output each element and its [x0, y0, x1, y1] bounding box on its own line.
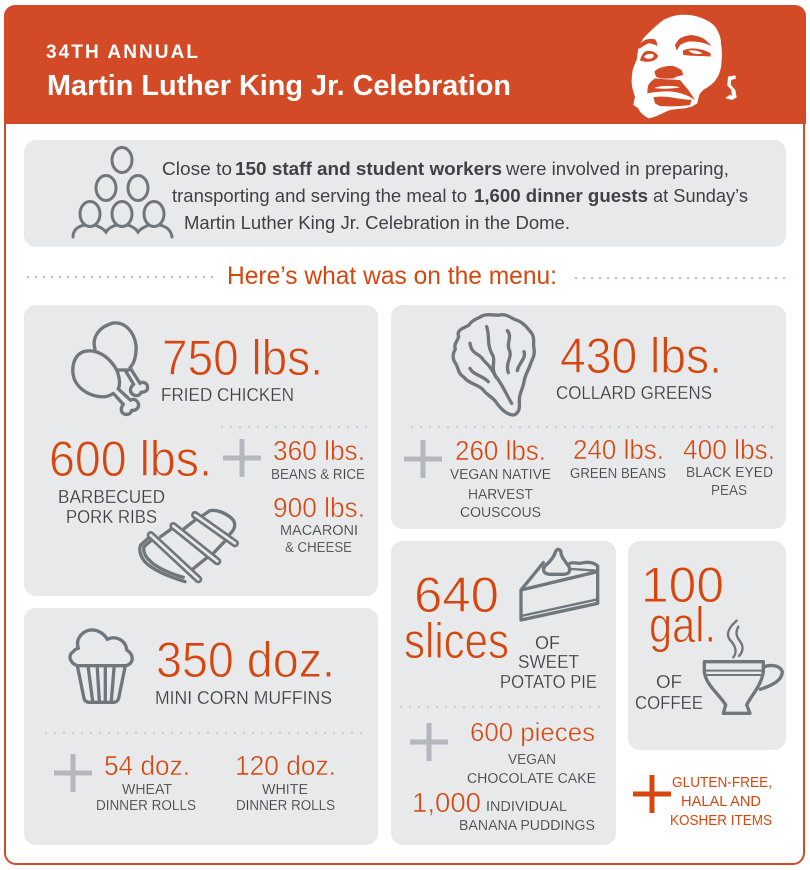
- panel: intro: [24, 140, 786, 247]
- stat: white dinner rolls: DINNER ROLLS: [236, 797, 335, 814]
- facial features: [637, 35, 712, 106]
- callout: gluten-free, halal and kosher: [633, 774, 772, 829]
- stat: vegan chocolate cake: CHOCOLATE CAKE: [467, 770, 596, 787]
- stat: vegan chocolate cake: [467, 717, 596, 787]
- stat: couscous: COUSCOUS: [460, 504, 541, 521]
- stat: beans and rice: BEANS & RICE: [271, 466, 365, 483]
- intro text: Close to: [162, 158, 232, 179]
- stat: white dinner rolls: [235, 750, 336, 814]
- menu heading: Here’s what was on the menu:: [227, 262, 557, 290]
- stat: coffee: [635, 557, 724, 713]
- stat: coffee: OF: [656, 672, 682, 692]
- stat: white dinner rolls: WHITE: [262, 781, 308, 798]
- stat: macaroni and cheese: [273, 492, 365, 556]
- intro text: [162, 158, 748, 233]
- callout: gluten-free, halal and kosher: KOSHER ITEMS: [670, 812, 772, 829]
- stat: fried chicken: [161, 330, 323, 405]
- intro text: were involved in preparing,: [505, 158, 729, 179]
- intro text: Martin Luther King Jr. Celebration in the Dome.: [184, 212, 570, 233]
- header band: [4, 5, 806, 124]
- stat: sweet potato pie: [404, 567, 597, 692]
- stat: sweet potato pie: POTATO PIE: [500, 672, 597, 692]
- stat: macaroni and cheese: 900 lbs.: [273, 492, 365, 523]
- stat: barbecued pork ribs: 600 lbs.: [49, 431, 212, 487]
- stat: mini corn muffins: MINI CORN MUFFINS: [155, 688, 332, 708]
- header kicker: 34TH ANNUAL: [46, 42, 198, 63]
- stat: wheat dinner rolls: 54 doz.: [104, 750, 190, 781]
- stat: mini corn muffins: 350 doz.: [156, 632, 335, 688]
- panel: corn muffins: [24, 608, 378, 845]
- stat: barbecued pork ribs: BARBECUED: [58, 487, 165, 507]
- stat: coffee: 100: [641, 557, 724, 613]
- callout: gluten-free, halal and kosher: GLUTEN-FREE,: [672, 774, 772, 791]
- stat: banana puddings: 1,000: [412, 787, 481, 818]
- ear: [725, 75, 737, 100]
- stat: green beans: GREEN BEANS: [570, 465, 666, 482]
- stat: black eyed peas: PEAS: [711, 482, 747, 499]
- intro text: 150 staff and student workers: [235, 158, 502, 179]
- stat: barbecued pork ribs: PORK RIBS: [66, 507, 157, 527]
- stat: black eyed peas: [683, 434, 775, 499]
- stat: barbecued pork ribs: [49, 431, 212, 527]
- icon: chicken drumsticks: [73, 323, 148, 414]
- icon: portrait of Martin Luther King Jr.: [632, 15, 737, 118]
- stat: couscous: HARVEST: [468, 486, 533, 503]
- stat: black eyed peas: 400 lbs.: [683, 434, 775, 465]
- stat: banana puddings: INDIVIDUAL: [486, 798, 567, 815]
- stat: couscous: VEGAN NATIVE: [450, 466, 551, 483]
- stat: vegan chocolate cake: VEGAN: [508, 751, 556, 768]
- icon: group of people: [73, 148, 172, 237]
- stat: wheat dinner rolls: DINNER ROLLS: [96, 797, 196, 814]
- stat: vegan chocolate cake: 600 pieces: [470, 717, 595, 747]
- stat: sweet potato pie: slices: [404, 613, 509, 669]
- callout: gluten-free, halal and kosher: HALAL AND: [681, 793, 761, 810]
- panel: sweet potato pie: [391, 541, 616, 845]
- stat: fried chicken: FRIED CHICKEN: [161, 385, 294, 405]
- icon: collard leaf: [453, 315, 534, 415]
- stat: mini corn muffins: [155, 632, 335, 708]
- stat: black eyed peas: BLACK EYED: [686, 464, 773, 481]
- icon: plus: [404, 440, 442, 478]
- panel: coffee: [628, 541, 786, 750]
- stat: collard greens: [556, 328, 722, 403]
- stat: coffee: COFFEE: [635, 693, 703, 713]
- stat: collard greens: 430 lbs.: [560, 328, 722, 384]
- stat: macaroni and cheese: MACARONI: [280, 522, 358, 539]
- stat: beans and rice: 360 lbs.: [273, 435, 365, 466]
- intro text: transporting and serving the meal to: [172, 185, 467, 206]
- icon: plus: [410, 723, 448, 761]
- stat: sweet potato pie: OF: [535, 633, 560, 653]
- stat: wheat dinner rolls: [96, 750, 196, 814]
- stat: collard greens: COLLARD GREENS: [556, 383, 712, 403]
- panel: chicken and ribs: [24, 305, 378, 596]
- stat: banana puddings: [412, 787, 595, 834]
- stat: sweet potato pie: 640: [414, 567, 499, 623]
- icon: ribs: [140, 510, 235, 582]
- stat: wheat dinner rolls: WHEAT: [122, 781, 172, 798]
- icon: plus: [223, 439, 261, 477]
- stat: macaroni and cheese: & CHEESE: [285, 539, 352, 556]
- icon: muffin: [70, 630, 132, 702]
- icon: pie slice: [521, 549, 598, 620]
- stat: banana puddings: BANANA PUDDINGS: [459, 817, 595, 834]
- stat: green beans: 240 lbs.: [573, 434, 664, 465]
- stat: beans and rice: [271, 435, 365, 483]
- stat: couscous: 260 lbs.: [455, 435, 546, 466]
- stat: green beans: [570, 434, 666, 482]
- panel: collard greens: [391, 305, 786, 529]
- title: Martin Luther King Jr. Celebration: [47, 70, 511, 102]
- stat: sweet potato pie: SWEET: [518, 652, 579, 672]
- intro text: at Sunday’s: [653, 185, 748, 206]
- icon: plus: [54, 754, 92, 792]
- stat: fried chicken: 750 lbs.: [162, 330, 323, 386]
- intro text: 1,600 dinner guests: [474, 185, 648, 206]
- icon: coffee cup: [704, 621, 782, 713]
- stat: coffee: gal.: [649, 597, 716, 653]
- stat: couscous: [450, 435, 551, 521]
- stat: white dinner rolls: 120 doz.: [235, 750, 336, 781]
